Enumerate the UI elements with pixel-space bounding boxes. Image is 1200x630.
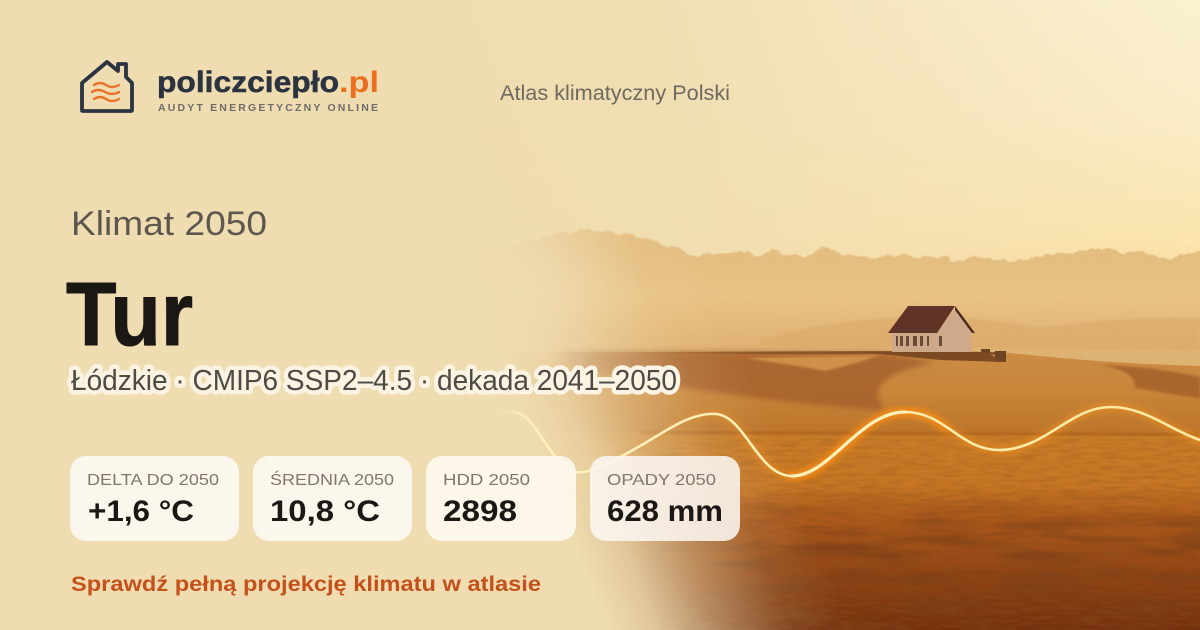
glowing wave [497, 407, 1200, 476]
call to action: Sprawdź pełną projekcję klimatu w atlasie [71, 573, 541, 596]
subtitle with halo: Łódzkie · CMIP6 SSP2–4.5 · dekada 2041–2050 [71, 365, 677, 397]
lit strip of the crest [745, 355, 880, 371]
horizon strip [620, 351, 1000, 355]
stat card: delta: +1,6 °C [88, 495, 194, 528]
far hills [760, 317, 1200, 352]
grain of the field [560, 438, 1200, 630]
stat card: average: ŚREDNIA 2050 [270, 470, 394, 489]
windows [896, 336, 942, 346]
header label: Atlas klimatyczny Polski [500, 82, 730, 105]
stat card: rainfall: OPADY 2050 [607, 472, 716, 489]
wordmark suffix: .pl [339, 66, 379, 99]
stat card: delta: DELTA DO 2050 [87, 472, 219, 489]
shed [981, 349, 1006, 362]
dark rows in the foreground [662, 498, 1200, 630]
stat card: HDD: HDD 2050 [443, 472, 530, 489]
icon: house with heat waves [82, 62, 132, 111]
stat card: average [253, 456, 412, 541]
field [0, 352, 1200, 630]
title: Tur [66, 265, 193, 365]
stat card: average: 10,8 °C [270, 495, 380, 528]
ground under the house [860, 352, 1005, 362]
stat card: HDD [426, 456, 576, 541]
background: landscape [528, 228, 1200, 630]
stat card: delta [70, 456, 239, 541]
tagline: AUDYT ENERGETYCZNY ONLINE [158, 102, 378, 114]
eyebrow: Klimat 2050 [71, 205, 267, 243]
stat card: HDD: 2898 [443, 495, 517, 528]
side wall [892, 333, 937, 352]
logo [82, 62, 379, 114]
wordmark: policzciepło [157, 66, 339, 99]
stat card: rainfall: 628 mm [607, 495, 723, 528]
gable wall [936, 308, 971, 352]
roof [888, 306, 955, 333]
dune shadow [560, 351, 935, 410]
right dune shadow [1100, 365, 1200, 398]
stat card: rainfall [590, 456, 740, 541]
house on the hill [860, 306, 1006, 362]
distant tree line [480, 230, 1200, 356]
furrow line [640, 431, 1200, 436]
